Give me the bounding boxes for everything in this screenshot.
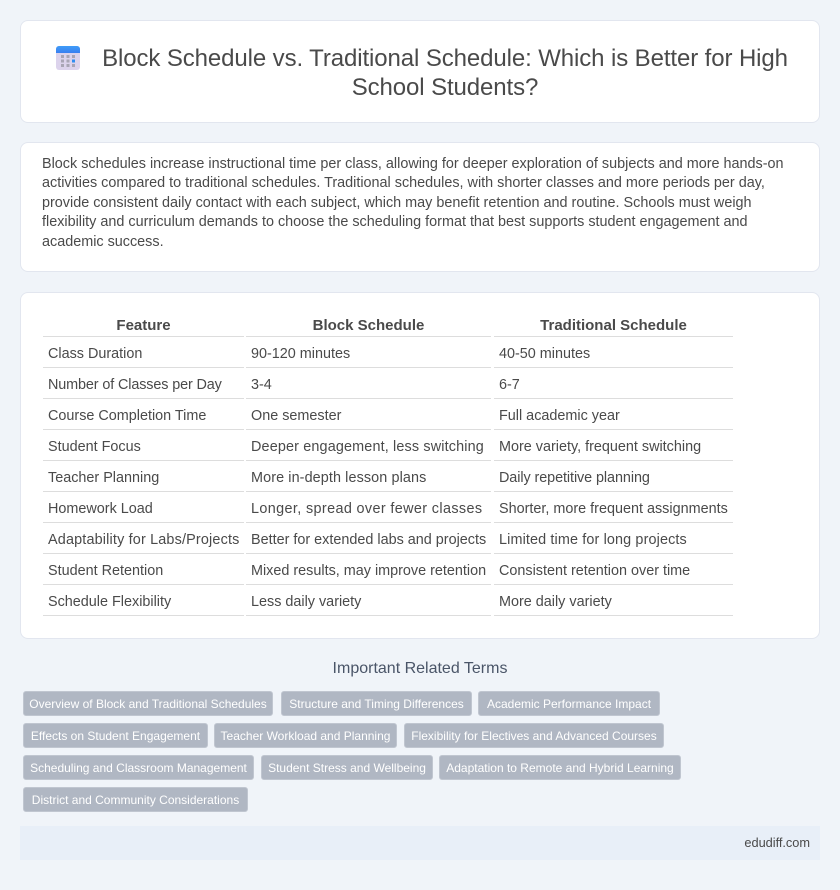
comparison table: Full academic year [499,408,620,424]
related terms tags: Academic Performance Impact [487,697,651,711]
related terms heading: Important Related Terms [333,660,507,677]
comparison table: Course Completion Time [48,408,206,424]
comparison table: One semester [251,408,341,424]
comparison table: Shorter, more frequent assignments [499,501,728,517]
comparison table: Traditional Schedule [540,317,687,334]
footer brand: edudiff.com [744,835,810,850]
footer bar [20,826,820,860]
intro text: academic success. [42,234,164,250]
title card [20,20,820,123]
comparison table: 40-50 minutes [499,346,590,362]
related terms tags: Overview of Block and Traditional Schedules [29,697,267,711]
heading: School Students? [352,74,538,101]
comparison table: Block Schedule [313,317,424,334]
comparison table: Deeper engagement, less switching [251,439,484,455]
comparison table: Student Retention [48,563,163,579]
comparison table: More daily variety [499,594,612,610]
intro text: activities compared to traditional schedules. Traditional schedules, with shorter classes and more periods per day, [42,175,765,191]
panel: comparison table [20,292,820,639]
comparison table: Mixed results, may improve retention [251,563,486,579]
intro text [42,156,784,250]
comparison table: More variety, frequent switching [499,439,701,455]
comparison table: Less daily variety [251,594,361,610]
comparison table: Teacher Planning [48,470,159,486]
heading [102,45,788,101]
comparison table: Schedule Flexibility [48,594,171,610]
comparison table: Consistent retention over time [499,563,690,579]
comparison table: Limited time for long projects [499,532,687,548]
comparison table: 3-4 [251,377,272,393]
heading: Block Schedule vs. Traditional Schedule: Which is Better for High [102,45,788,72]
comparison table: Homework Load [48,501,153,517]
comparison table: Longer, spread over fewer classes [251,501,482,517]
comparison table: Better for extended labs and projects [251,532,486,548]
comparison table: Adaptability for Labs/Projects [48,532,239,548]
related terms tags: Scheduling and Classroom Management [30,761,247,775]
comparison table [43,317,733,616]
related terms tags: District and Community Considerations [32,793,239,807]
icon: calendar [56,46,80,70]
comparison table: Daily repetitive planning [499,470,650,486]
comparison table: Number of Classes per Day [48,377,222,393]
comparison table: 6-7 [499,377,520,393]
comparison table: Feature [116,317,171,334]
panel: intro [20,142,820,272]
comparison table: Class Duration [48,346,142,362]
related terms tags: Structure and Timing Differences [289,697,464,711]
intro text: Block schedules increase instructional time per class, allowing for deeper exploration of subjects and more hands-on [42,156,784,172]
intro text: provide consistent daily contact with each subject, which may benefit retention and routine. Schools must weigh [42,194,752,210]
related terms tags: Flexibility for Electives and Advanced Courses [411,729,657,743]
comparison table: 90-120 minutes [251,346,350,362]
comparison table: More in-depth lesson plans [251,470,426,486]
intro text: flexibility and curriculum demands to choose the scheduling format that best supports student engagement and [42,214,748,230]
comparison table: Student Focus [48,439,141,455]
related terms tags [23,691,681,812]
related terms tags: Teacher Workload and Planning [221,729,390,743]
related terms tags: Student Stress and Wellbeing [268,761,426,775]
related terms tags: Effects on Student Engagement [31,729,200,743]
related terms tags: Adaptation to Remote and Hybrid Learning [446,761,674,775]
